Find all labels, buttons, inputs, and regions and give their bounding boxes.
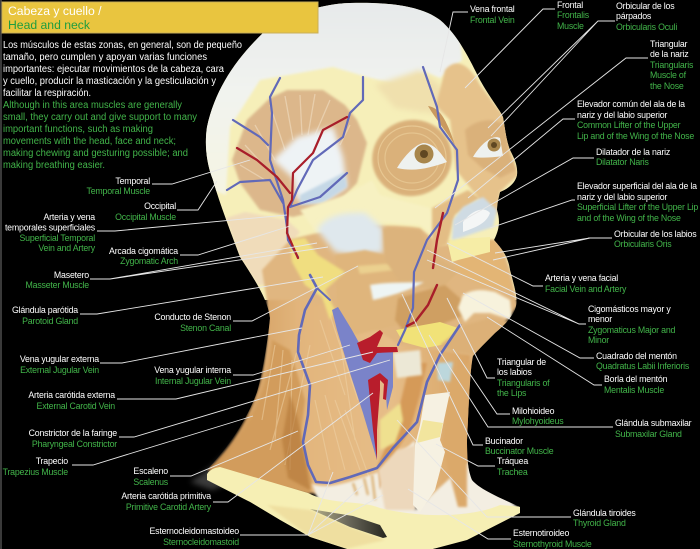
label: zygomaticus: Zygomaticus Major and [588, 325, 676, 335]
cheek muscle mid [382, 228, 398, 271]
label: triangularis of the nose: de la nariz [650, 49, 688, 59]
label: sternothyroid: Sternothyroid Muscle [513, 539, 592, 549]
intro text english: important functions, such as making [3, 124, 153, 135]
label: external carotid: External Carotid Vein [37, 401, 115, 411]
label: buccinator: Buccinator Muscle [485, 446, 554, 456]
label: stenon canal: Conducto de Stenon [154, 312, 231, 322]
label: external jugular vein: Vena yugular externa [20, 354, 99, 364]
parotid gland [290, 238, 345, 320]
temporal artery [237, 117, 347, 258]
label: superficial lifter: Superficial Lifter of the Upper Lip [577, 202, 698, 212]
label: mylohyoideus: Milohioideo [512, 406, 555, 416]
label: submaxilar gland [429, 335, 692, 439]
trapezius dark [252, 341, 312, 494]
label: buccinator: Bucinador [485, 436, 523, 446]
label: triangularis of the nose: the Nose [650, 81, 684, 91]
label: triangularis of the lips: Triangular de [497, 357, 546, 367]
forehead pale streaks [378, 68, 442, 114]
label: dilatator naris: Dilatador de la nariz [596, 147, 670, 157]
intro text english: making breathing easier. [3, 160, 105, 171]
intro text spanish: facilitar la respiración. [3, 88, 91, 99]
label: pharyngeal constrictor [29, 360, 390, 449]
label: zygomatic arch: Zygomatic Arch [120, 256, 178, 266]
scalene darker band [282, 395, 310, 490]
label: frontalis: Muscle [557, 21, 584, 31]
nasal muscle [432, 190, 480, 250]
label: scalenus: Escaleno [133, 466, 168, 476]
label: superficial temporal vein and artery: Superficial Temporal [19, 233, 95, 243]
label: facial vein and artery: Arteria y vena facial [545, 273, 618, 283]
masseter muscle [336, 248, 384, 332]
label: orbicularis oculi: Orbicularis Oculi [616, 22, 677, 32]
intro text english: Although in this area muscles are generally [3, 100, 182, 111]
label: scalenus [133, 431, 298, 487]
shoulder and clavicle cream band [205, 467, 525, 549]
label: triangularis of the nose: Triangularis [650, 60, 694, 70]
label: mylohyoideus [453, 349, 564, 426]
near orbit ring [364, 111, 460, 205]
zygomatic arch bulge [226, 212, 300, 285]
intro text english: making chewing and gesturing possible; and [3, 148, 188, 159]
label: common lifter: nariz y del labio superior [577, 110, 667, 120]
label: submaxilar gland: Submaxilar Gland [615, 429, 682, 439]
strap muscle right [449, 360, 472, 509]
label: mentalis [487, 317, 668, 395]
label: triangularis of the nose: Triangular [650, 39, 688, 49]
facial artery [407, 213, 443, 326]
temporal veins [227, 77, 363, 257]
anatomical illustration: head and neck [190, 0, 530, 549]
label: orbicularis oculi: Orbicular de los [616, 1, 675, 11]
label: internal jugular vein: Internal Jugular Vein [155, 376, 231, 386]
label: sternocleidomastoid: Sternocleidomastoid [163, 537, 239, 547]
label: sternocleidomastoid [150, 472, 383, 547]
label: zygomaticus: Cigomásticos mayor y [588, 304, 671, 314]
label: superficial temporal vein and artery: temporales superficiales [5, 222, 96, 232]
central neck pale [378, 445, 415, 510]
heading: english: Head and neck [8, 18, 91, 32]
label: triangularis of the lips: the Lips [497, 388, 527, 398]
label: frontalis [465, 0, 590, 88]
label: orbicularis oris: Orbicularis Oris [614, 239, 672, 249]
near eye [397, 143, 447, 170]
label: temporal [86, 160, 250, 196]
label: internal jugular vein [154, 345, 350, 386]
label: quadratus labii: Quadratus Labii Inferioris [596, 361, 690, 371]
label: primitive carotid: Arteria carótida primitiva [121, 491, 211, 501]
label: temporal: Temporal [115, 176, 150, 186]
label: common lifter: Lip and of the Wing of the Nose [577, 131, 694, 141]
label: facial vein and artery [447, 243, 627, 294]
buccinator white tendon [370, 282, 424, 300]
label: superficial temporal vein and artery [5, 212, 287, 253]
label: orbicularis oculi [488, 1, 677, 136]
label: thyroid gland: Glándula tiroides [573, 508, 636, 518]
label: orbicularis oris: Orbicular de los labios [614, 229, 697, 239]
label: internal jugular vein: Vena yugular interna [154, 365, 231, 375]
label: facial vein and artery: Facial Vein and Artery [545, 284, 627, 294]
chin white muscle [458, 290, 512, 322]
label: thyroid gland [397, 420, 636, 528]
temporal muscle [232, 90, 367, 217]
larynx and trachea [413, 392, 450, 512]
label: trapezius: Trapezius Muscle [3, 467, 68, 477]
label: mylohyoideus: Mylohyoideus [512, 416, 564, 426]
label: triangularis of the lips: los labios [497, 367, 532, 377]
label: superficial lifter: and of the Wing of the Nose [577, 213, 681, 223]
tendon blue shade [300, 172, 347, 205]
veins [227, 67, 460, 483]
neck muscle streaks [262, 315, 370, 480]
label: trachea: Tráquea [497, 456, 528, 466]
label: superficial lifter: Elevador superficial del ala de la [577, 181, 697, 191]
label: triangularis of the lips: Triangularis of [497, 378, 550, 388]
label: zygomaticus [427, 250, 676, 345]
label: frontalis: Frontal [557, 0, 583, 10]
face lower base [261, 224, 516, 470]
label: quadratus labii [463, 293, 690, 371]
arteries [237, 117, 443, 326]
label: superficial lifter: nariz y del labio superior [577, 192, 667, 202]
label: parotid gland [12, 277, 323, 326]
label: quadratus labii: Cuadrado del mentón [596, 351, 677, 361]
label: occipital: Occipital Muscle [115, 212, 176, 222]
temporal tendon white [273, 127, 347, 203]
label: external jugular vein: External Jugular Vein [20, 365, 99, 375]
frontal and facial vein [398, 67, 458, 345]
intro text english [3, 100, 197, 171]
carotid arteries [357, 330, 398, 363]
label: masseter [26, 243, 328, 290]
neck muscles gradient [207, 300, 470, 500]
header band [2, 2, 318, 33]
temporal muscle streaks [240, 94, 350, 180]
label: sternocleidomastoid: Esternocleidomastoideo [150, 526, 239, 536]
label: temporal: Temporal Muscle [86, 186, 150, 196]
label: buccinator [402, 294, 554, 456]
intro text spanish: y cuello, producir la masticación y la gesticulación y [3, 76, 216, 87]
label: mentalis: Mentalis Muscle [604, 385, 664, 395]
frontalis muscle tan [436, 63, 518, 215]
label: common lifter: Elevador común del ala de la [577, 99, 685, 109]
intro text spanish: importantes: ejecutar movimientos de la cabeza, cara [3, 64, 225, 75]
internal jugular vein large [332, 307, 393, 460]
label: trapezius: Trapecio [36, 456, 68, 466]
label: orbicularis oculi: párpados [616, 11, 652, 21]
label: trapezius [3, 416, 253, 477]
upper lip cream [447, 237, 490, 262]
stenon canal bar [357, 264, 392, 274]
nose ala [452, 197, 497, 240]
label: trachea [436, 444, 528, 477]
label: stenon canal [154, 266, 358, 333]
thyroid gland left lobe [380, 403, 403, 450]
label: stenon canal: Stenon Canal [180, 323, 231, 333]
intro text english: small, they carry out and give support to many [3, 112, 197, 123]
clavicle tan shadow [267, 505, 385, 549]
label: triangularis of the nose: Muscle of [650, 70, 687, 80]
label: primitive carotid: Primitive Carotid Artery [126, 502, 212, 512]
skull base tone [200, 0, 530, 300]
cheek cream [300, 183, 430, 230]
label: zygomatic arch [109, 226, 290, 266]
whitish grid above trachea [393, 350, 422, 378]
intro text spanish: tamaño, pero cumplen y apoyan varias funciones [3, 52, 207, 63]
label: frontal vein: Frontal Vein [470, 15, 515, 25]
strap muscle left [378, 363, 427, 490]
brow muscle [428, 106, 455, 145]
label: thyroid gland: Thyroid Gland [573, 518, 626, 528]
masseter white tendon [317, 213, 383, 255]
label: scalenus: Scalenus [133, 477, 169, 487]
label: external jugular vein [20, 328, 302, 375]
lower neck tan stripes [353, 475, 375, 500]
submaxillary gland [396, 322, 458, 348]
neck lower white [312, 440, 520, 520]
label: masseter: Masseter Muscle [26, 280, 89, 290]
label: superficial lifter [490, 181, 698, 228]
label: triangularis of the nose [435, 39, 694, 208]
label: occipital [115, 181, 217, 222]
jaw dark muscle [394, 285, 462, 329]
label: frontal vein: Vena frontal [470, 4, 515, 14]
label: external carotid [28, 352, 373, 411]
label: orbicularis oris [493, 229, 697, 260]
label: triangularis of the lips [447, 298, 550, 398]
label: trachea: Trachea [497, 467, 528, 477]
external jugular vein [298, 275, 460, 483]
label: masseter: Masetero [54, 270, 89, 280]
label: pharyngeal constrictor: Constrictor de la faringe [29, 428, 117, 438]
label: zygomatic arch: Arcada cigomática [109, 246, 178, 256]
label: primitive carotid [121, 393, 373, 512]
far eye [473, 137, 503, 158]
label: parotid gland: Parotoid Gland [22, 316, 78, 326]
label: pharyngeal constrictor: Pharyngeal Constrictor [32, 439, 117, 449]
label: sternothyroid [408, 489, 592, 549]
label: parotid gland: Glándula parótida [12, 305, 78, 315]
label: mentalis: Borla del mentón [604, 374, 668, 384]
cranial white cap [200, 0, 462, 195]
label: frontal vein [440, 4, 515, 72]
label: dilatator naris [455, 147, 670, 225]
label: sternothyroid: Esternotiroideo [513, 528, 569, 538]
label: common lifter [468, 99, 694, 198]
left edge strip [0, 0, 2, 549]
intro text english: movements with the head, face and neck; [3, 136, 176, 147]
label: zygomaticus: menor [588, 314, 612, 324]
label: dilatator naris: Dilatator Naris [596, 157, 650, 167]
chin tan lower [440, 318, 512, 355]
neck shadow behind shoulder [190, 435, 262, 490]
thyroid-area pale blue [437, 362, 453, 382]
clavicle dark gap [310, 509, 387, 538]
label: submaxilar gland: Glándula submaxilar [615, 418, 692, 428]
thyroid gland centre [417, 420, 443, 443]
intro text spanish: Los músculos de estas zonas, en general, son de pequeño [3, 40, 243, 51]
label: frontalis: Frontalis [557, 10, 590, 20]
orbicularis oris [455, 240, 512, 290]
intro text spanish [3, 40, 243, 99]
label: superficial temporal vein and artery: Vein and Artery [38, 243, 96, 253]
label: superficial temporal vein and artery: Arteria y vena [44, 212, 95, 222]
far orbit ring [465, 120, 516, 178]
label: external carotid: Arteria carótida externa [28, 390, 115, 400]
label: occipital: Occipital [144, 201, 176, 211]
heading: spanish: Cabeza y cuello / [8, 4, 102, 18]
label: zygomaticus: Minor [588, 335, 609, 345]
label: common lifter: Common Lifter of the Upper [577, 120, 681, 130]
